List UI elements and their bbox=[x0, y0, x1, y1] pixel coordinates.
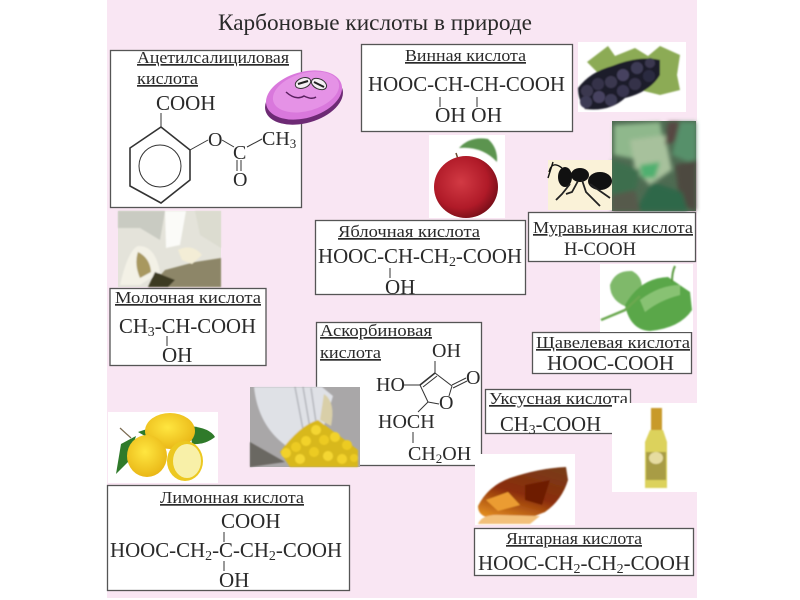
panel: lactic acid: -CH-COOH bbox=[155, 314, 256, 338]
pink background panel bbox=[107, 0, 697, 598]
image: sorrel leaves bbox=[600, 264, 693, 332]
panel: citric acid bbox=[108, 486, 350, 592]
panel: malic acid: Яблочная кислота bbox=[338, 222, 480, 241]
panel: citric acid: 2 bbox=[269, 549, 276, 564]
icon: smiling pill bbox=[259, 62, 349, 133]
panel: citric acid: OH bbox=[219, 568, 249, 592]
panel: acetylsalicylic acid: O bbox=[208, 129, 222, 151]
panel: acetylsalicylic acid: кислота bbox=[137, 69, 198, 88]
panel: citric acid: COOH bbox=[221, 509, 281, 533]
image: ant bbox=[548, 160, 612, 210]
panel: ascorbic acid: HOCH bbox=[378, 411, 435, 433]
panel: ascorbic acid: OH bbox=[442, 443, 471, 465]
panel: tartaric acid: OH OH bbox=[435, 103, 502, 127]
panel: succinic acid: 2 bbox=[574, 562, 581, 577]
title: Карбоновые кислоты в природе bbox=[218, 10, 532, 35]
image: grapes bbox=[578, 42, 686, 112]
panel: citric acid: -COOH bbox=[276, 538, 342, 562]
image: vitamin bottle with yellow pills bbox=[250, 387, 360, 467]
panel: oxalic acid: Щавелевая кислота bbox=[536, 333, 690, 352]
panel: malic acid: -COOH bbox=[456, 244, 522, 268]
panel: formic acid: Муравьиная кислота bbox=[533, 218, 693, 237]
panel: oxalic acid bbox=[532, 332, 692, 375]
panel: formic acid bbox=[528, 212, 696, 262]
panel: succinic acid: 2 bbox=[617, 562, 624, 577]
panel: malic acid bbox=[316, 220, 526, 299]
image: apple bbox=[429, 135, 505, 218]
panel: citric acid: HOOC-CH bbox=[110, 538, 206, 562]
panel: acetylsalicylic acid: 3 bbox=[290, 136, 296, 151]
panel: succinic acid bbox=[474, 528, 694, 577]
panel: acetylsalicylic acid: C bbox=[233, 142, 246, 164]
panel: lactic acid: CH bbox=[119, 314, 148, 338]
panel: malic acid: OH bbox=[385, 275, 415, 299]
panel: ascorbic acid: O bbox=[466, 367, 480, 389]
panel: acetic acid bbox=[486, 389, 630, 438]
panel: acetic acid: -COOH bbox=[536, 412, 601, 436]
panel: acetic acid: CH bbox=[500, 412, 529, 436]
panel: formic acid: H-COOH bbox=[564, 239, 636, 260]
panel: citric acid: Лимонная кислота bbox=[160, 488, 304, 507]
panel: lactic acid: 3 bbox=[148, 325, 155, 340]
panel: ascorbic acid: HO bbox=[376, 374, 405, 396]
panel: acetylsalicylic acid: CH bbox=[262, 128, 290, 150]
panel: ascorbic acid: Аскорбиновая bbox=[320, 321, 432, 340]
panel: tartaric acid: Винная кислота bbox=[405, 46, 526, 65]
panel: ascorbic acid: кислота bbox=[320, 343, 381, 362]
panel: tartaric acid: HOOC-CH-CH-COOH bbox=[368, 72, 565, 96]
panel: citric acid: 2 bbox=[205, 549, 212, 564]
panel: acetic acid: 3 bbox=[529, 423, 536, 438]
panel: oxalic acid: HOOC-COOH bbox=[547, 351, 674, 375]
panel: malic acid: 2 bbox=[449, 255, 456, 270]
panel: citric acid: -C-CH bbox=[212, 538, 269, 562]
image: nettle plant bbox=[612, 121, 696, 211]
image: milk splash bbox=[118, 211, 221, 287]
image: vinegar bottle bbox=[612, 403, 697, 492]
panel: acetic acid: Уксусная кислота bbox=[489, 389, 628, 408]
panel: succinic acid: Янтарная кислота bbox=[506, 529, 642, 548]
panel: acetylsalicylic acid: COOH bbox=[156, 91, 216, 115]
panel: acetylsalicylic acid bbox=[110, 48, 302, 208]
panel: ascorbic acid: CH bbox=[408, 443, 436, 465]
panel: ascorbic acid: OH bbox=[432, 340, 461, 362]
benzene ring structure bbox=[130, 113, 262, 203]
panel: lactic acid bbox=[110, 288, 266, 367]
panel: succinic acid: -COOH bbox=[624, 551, 690, 575]
panel: succinic acid: -CH bbox=[581, 551, 617, 575]
panel: acetylsalicylic acid: O bbox=[233, 169, 247, 191]
image: lemons bbox=[108, 412, 218, 483]
panel: malic acid: HOOC-CH-CH bbox=[318, 244, 450, 268]
panel: succinic acid: HOOC-CH bbox=[478, 551, 574, 575]
panel: ascorbic acid: 2 bbox=[436, 451, 442, 466]
panel: ascorbic acid: O bbox=[439, 392, 453, 414]
panel: tartaric acid bbox=[362, 44, 572, 132]
panel: lactic acid: Молочная кислота bbox=[115, 288, 261, 307]
panel: acetylsalicylic acid: Ацетилсалициловая bbox=[137, 48, 289, 67]
image: amber bbox=[475, 454, 575, 525]
panel: ascorbic acid bbox=[316, 321, 482, 466]
lactone ring bbox=[404, 361, 467, 443]
panel: lactic acid: OH bbox=[162, 343, 192, 367]
